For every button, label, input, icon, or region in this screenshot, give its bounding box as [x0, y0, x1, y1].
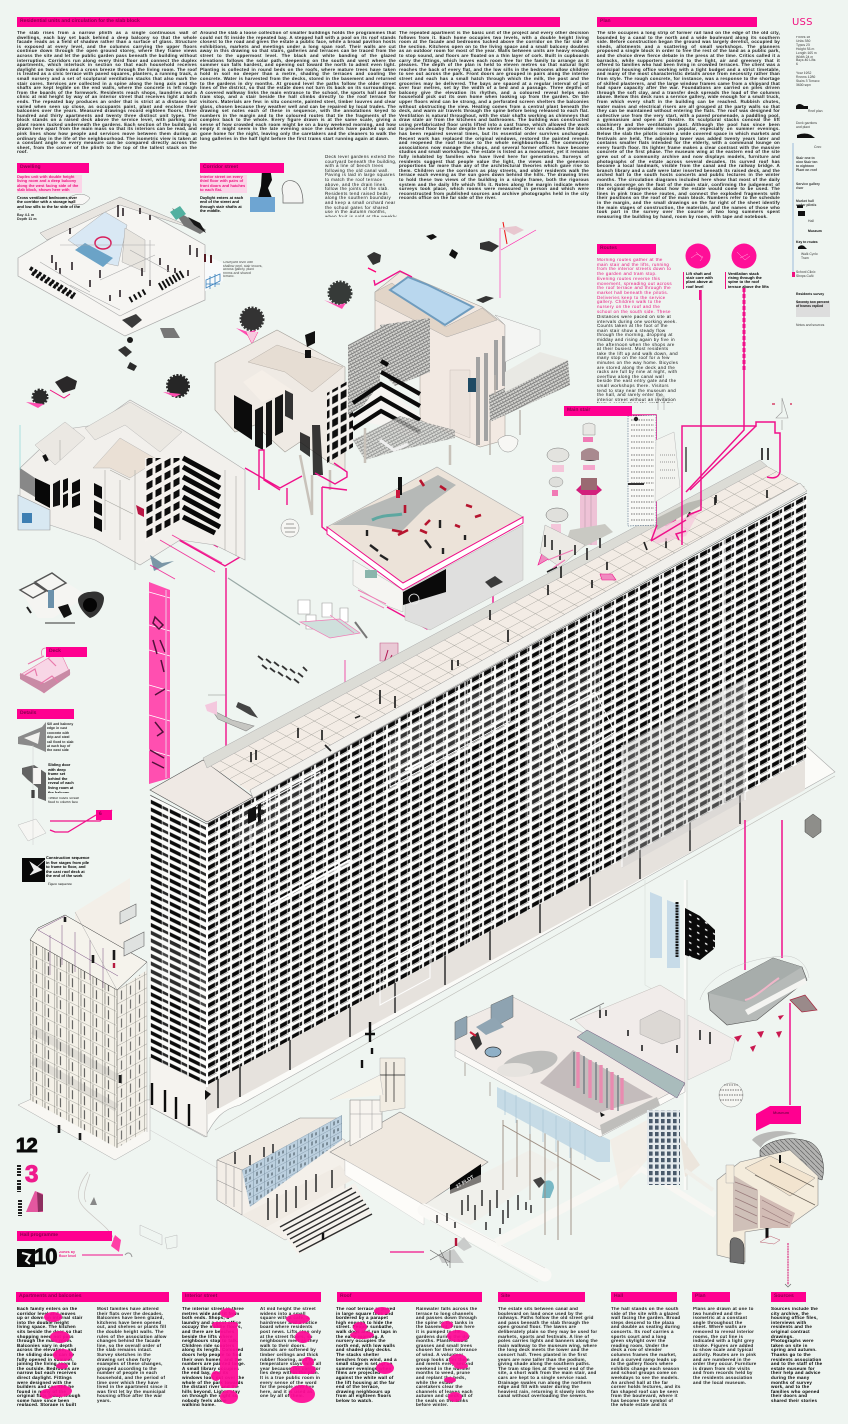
heading: pink tag details: Details	[20, 710, 36, 716]
text block: right rail notes: Seventy two percent of homes replied	[796, 300, 829, 308]
heading: section bar one: Residential units and circulation for the slab block	[20, 18, 140, 24]
machine near roof end	[205, 695, 258, 770]
faint sketch lower left	[78, 1172, 177, 1257]
heading: section bar two: Plan	[600, 18, 611, 24]
text block: column four: The site occupies a long strip of former rail land on the edge of the old city, bounded by a canal to the north and a wide boulevard along its southern side. Before construction began the ground was largely derelict, occupied by sheds, allotments and a scattering of small workshops. The planners proposed a single block in order to free the rest of the land as a public park, and the choice drew fierce debate in the press at the time. Critics called it a barracks, while supporters pointed to the light, air and greenery that it offered to families who had been living in crowded terraces. The client was a municipal housing office working with a tight budget and a strict timetable, and many of the most characteristic details arose from necessity rather than from style. The rough concrete, for instance, was a response to the shortage of skilled plasterers, and the large window frames came from a shipyard that had spare capacity after the war. Foundations are carried on piles driven through the soft clay, and a transfer deck spreads the load of the columns above. Below this deck runs a service gallery, wide enough for a small truck, from which every shaft in the building can be reached. Rubbish chutes, water mains and electrical risers are all grouped at the party walls so that they can be maintained without entering the flats. The roof was designed for collective use from the very start, with a paved promenade, a paddling pool, a gymnasium and open air theatre. Its sculptural stacks conceal the lift machinery and the ventilation plant. Although the pool has since been closed, the promenade remains popular, especially on summer evenings. Below the slab the pilotis create a wide covered space in which markets and festivals are held. The adjoining tower was added twenty years later and contains smaller flats intended for the elderly, with a communal lounge on every fourth floor. Its lighter frame makes a clear contrast with the massive concrete of the first phase. The museum wing at the eastern end of the site grew out of a community archive and now displays models, furniture and photographs of the estate across several decades. Its curved roof has become a local landmark, visible from the canal and the railway bridge. A branch library and a café were later inserted beneath its raised deck, and the arched hall to the south hosts concerts and public lectures in the winter months. The circulation diagrams included here show that most of the daily routes converge on the foot of the main stair, confirming the judgement of the original designers about how the estate would come to be used. The lines in pink trace these routes, and connect the exploded fragments with their positions on the roof of the main block. Numbers refer to the schedule in the margin, and the small drawings on the far right of the sheet identify the main stages of construction, the materials, and the names of those who took part in the survey over the course of two long summers spent measuring the building by hand, room by room, with tape and notebook.	[597, 31, 780, 219]
heading: bottom bar 2	[182, 1292, 321, 1302]
heading: bottom bar 7: Sources	[774, 1293, 794, 1299]
text block: pink and black notes A: Bay 4.1 m Depth 11 m	[17, 213, 37, 221]
inset caption graphic: blue grid	[205, 254, 223, 291]
crowd	[437, 1190, 531, 1234]
stem glyphs under pink circle	[742, 288, 746, 372]
heading: bottom bar 1	[16, 1292, 169, 1302]
roof: end slab, parapet and tile terrace	[150, 448, 807, 822]
text block: right rail notes: Walk Cycle Tram	[801, 252, 818, 260]
tall glass panels	[650, 892, 662, 958]
left mass	[215, 330, 345, 470]
exhibit crowd	[332, 475, 456, 531]
heading: pink tag diagram	[46, 647, 87, 656]
caption: emblem: Figure sequence	[48, 882, 72, 886]
hatched mid mass	[348, 328, 380, 415]
pink circles	[686, 244, 756, 268]
main slab building: right facade	[207, 493, 807, 1085]
central plaza block with sign	[330, 1022, 715, 1282]
right mass	[375, 272, 505, 447]
heading: pink tag diagram: Deck	[49, 648, 61, 654]
sketch thumbnails	[18, 722, 46, 845]
heading: pink bar lower left: Hall programme	[20, 1232, 58, 1238]
numerals artwork	[17, 1165, 43, 1267]
tags	[120, 904, 144, 956]
sign text: plot: 27 PLOT	[455, 1174, 475, 1190]
sign text: pink box label: Museum	[773, 1110, 789, 1115]
building: museum plate	[455, 880, 735, 1190]
black emblem	[22, 858, 45, 882]
title: USS: USS	[792, 17, 813, 28]
heading: bottom bar 4	[498, 1292, 585, 1302]
heading: bottom bar 6: Plan	[695, 1293, 706, 1299]
text block: right rail notes: Residents survey	[796, 292, 824, 296]
heading: pink tag A: Dwelling	[20, 164, 41, 170]
icons: sketch figures beside pink heading	[68, 168, 303, 212]
heading: pink tag B: Corridor street	[203, 164, 238, 170]
text block: column one: The slab rises from a narrow plinth as a single continuous wall of dwellings, each bay set back behind a deep balcony so that the whole facade reads as a field of shadow rather than a surface of glass. Structure is exposed at every level, and the columns carrying the upper floors continue down through the open ground storey, where they frame views across the site and let the public garden pass beneath the building without interruption. Corridors run along every third floor and connect the duplex apartments, which interlock in section so that each household receives daylight on two sides and a cross breeze through the living room. The roof is treated as a civic terrace with paved squares, planters, a running track, a small nursery and a set of sculptural ventilation stacks that also mark the stair cores. Services are collected in a spine along the long axis and the shafts are kept legible on the end walls, where the concrete is left rough from the boards of the formwork. Residents reach shops, laundries and a clinic at mid height by way of an interior street that receives light at both ends. The repeated bay produces an order that is strict at a distance but varied when seen up close, as occupants paint, plant and enclose their balconies over the years. Measured drawings record eighteen floors, three hundred and thirty apartments and twenty three distinct unit types. The block stands on a raised deck above the service level, with parking and plant rooms tucked underneath the gardens. Each section of the building is drawn here apart from the main mass so that its interiors can be read, and pink lines show how people and services move between them during an ordinary day in the life of the neighbourhood. The isometric view is taken at a constant angle so every measure can be compared directly across the sheet, from the corner of the plinth to the top of the tallest stack on the roof.	[17, 31, 197, 154]
building: lower hall with blue glazing	[217, 1115, 372, 1255]
main slab building: plate	[150, 745, 835, 1137]
numeral: 3: 3	[25, 1161, 38, 1188]
text block: right rail notes: Stair one to nine Stair ten to eighteen Plant on roof	[796, 156, 817, 172]
numeral: 10: 10	[34, 1244, 56, 1269]
interior striped walls	[733, 1175, 758, 1232]
text block: detail notes one: Sill and balcony edge in cast concrete with drip and steel rail fixed to slab at each bay of the west side	[47, 722, 73, 752]
text block: right rail notes: Hall	[808, 219, 814, 223]
text block: right rail notes: Core	[814, 145, 821, 149]
green-grey slab	[577, 1030, 685, 1098]
building: arched section with fan roof	[685, 1131, 824, 1264]
heading: pink tag upper roof	[564, 406, 632, 416]
heading: pink bar lower left	[17, 1231, 112, 1240]
numeral: 12: 12	[16, 1135, 37, 1157]
hatched pink core	[540, 1050, 653, 1113]
text block: right rail notes: School Clinic Shops Café	[796, 270, 816, 278]
small hex object	[805, 814, 821, 838]
text block: column three: The repeated apartment is the basic unit of the project and every other decision follows from it. Each home occupies two levels, with a double height living room at the facade and bedrooms tucked above the corridor on the far side of the section. Kitchens open on to the living space and a small balcony doubles as an outdoor room for most of the year. Walls between units are heavy enough to stop sound, and floors are floated on a thin layer of cork. Built in cupboards carry the fittings, which leaves each room free for the family to arrange as it pleases. The depth of the plan is held to eleven metres so that natural light reaches the back of every flat, and the low sills in the bedrooms allow children to see out across the park. Front doors are grouped in pairs along the interior street and each has a small hatch through which the milk, the post and the groceries may be delivered. The bays are spaced at a regular interval of just over four metres, set by the width of a bed and a passage. Three depths of balcony give the elevation its rhythm, and a coloured reveal helps each household pick out its own home when looking up from the garden. On the upper floors wind can be strong, and a perforated screen shelters the balconies without obstructing the view. Heating comes from a central plant beneath the deck, and warm air travels through the spine before being released to each flat. Ventilation is natural throughout, with the stair shafts working as chimneys that draw stale air from the kitchens and bathrooms. The building was constructed using prefabricated floor units lifted into a cast frame, which allowed the work to proceed floor by floor despite the winter weather. Over six decades the block has been repaired several times, but its essential order survives unchanged. Recent work has replaced the original windows, restored the painted reveals and reopened the roof terrace to the whole neighbourhood. The community associations now manage the shops, and several former offices have become studios and small workshops. The estate is listed as a monument, yet it remains fully inhabited by families who have lived here for generations. Surveys of residents suggest that people value the light, the views and the generous proportions far more than any of the architectural theories which gave rise to them. Children use the corridors as play streets, and older residents walk the terrace each evening as the sun goes down behind the hills. The drawing tries to hold these two views of the building in a single frame, both the rigorous system and the daily life which fills it. Notes along the margin indicate where surveys took place, which rooms were measured in person and which were reconstructed from published sources and archive photographs held in the city records office on the far side of the river.	[399, 31, 589, 200]
chevron stripes	[353, 361, 420, 432]
heading: pink tag route: 6	[99, 811, 102, 817]
heading: pink tag C: Routes	[600, 245, 617, 251]
building: central stepped complex with pool	[215, 272, 570, 515]
building: exhibition pavilion	[327, 467, 523, 630]
heading: section bar one	[17, 17, 560, 26]
facade ghost overlays	[150, 493, 807, 1087]
crowd cluster	[258, 656, 307, 683]
heading: bottom bar 1: Apartments and balconies	[19, 1293, 82, 1299]
text block: right rail notes: Market hall under pilotis	[796, 199, 816, 207]
text block: right rail notes: Service gallery riser	[796, 182, 820, 190]
heading: pink tag A	[17, 163, 89, 172]
roof people	[251, 448, 768, 762]
heading: bottom bar 7	[771, 1292, 806, 1302]
text block: right rail notes: Deck gardens and plant	[796, 121, 817, 129]
pink route arrow	[50, 810, 112, 832]
heading: pink tag route	[96, 810, 112, 820]
text block: right rail notes: Museum	[808, 229, 822, 233]
machine on plate	[455, 995, 513, 1040]
sketch text panel behind roof	[628, 396, 686, 526]
black sign	[450, 1164, 481, 1194]
text block: right rail notes: Year 1952 Rooms 1280 Stairs 3 Terrace 3600 sqm	[796, 71, 820, 87]
towers and mushroom objects	[281, 398, 792, 572]
heading: bottom bar 2: Interior street	[185, 1293, 217, 1299]
heading: pink tag upper roof: Main stair	[567, 407, 590, 413]
poles	[503, 1120, 600, 1240]
text block: bottom column 5: The roof terrace is paved in large square tiles and bordered by a parapet high enough to hide the street. People sunbathe, walk dogs and run laps in the early morning. A nursery occupies the north end, with low walls and shaded play decks. The stacks shelter benches from wind, and a small stage is set up on summer evenings when films are projected against the white wall of the lift housing at the far end of the terrace, drawing neighbours up from all eighteen floors below to watch.	[336, 1307, 397, 1403]
pink umbrellas	[734, 1015, 784, 1052]
round hatched globe	[719, 1083, 743, 1107]
heading: section bar two	[597, 17, 757, 26]
heading: bottom bar 5	[611, 1292, 677, 1302]
grey capsule	[700, 956, 817, 1052]
heading: bottom bar 4: Site	[501, 1293, 510, 1299]
arch	[730, 1238, 744, 1264]
text block: pink and black notes B	[200, 175, 247, 213]
building: top-left courtyard block	[18, 197, 206, 336]
black honeycomb mark	[677, 902, 715, 960]
heading: bottom bar 5: Hall	[614, 1293, 623, 1299]
heading: pink tag B	[200, 163, 284, 172]
heading: bottom bar 6	[692, 1292, 730, 1302]
heading: pink tag details	[17, 709, 74, 718]
steps	[280, 1188, 372, 1252]
pink dashed arrow	[785, 1243, 791, 1287]
right rail blue line and black glyphs	[792, 104, 815, 277]
lower-left tower	[18, 878, 217, 1168]
back room	[575, 985, 685, 1085]
mini diagram: panels and cable	[228, 578, 367, 638]
pink connector lines above roof	[82, 290, 790, 1255]
scattered black objects and trees	[26, 222, 536, 408]
courtyard floor	[68, 212, 127, 266]
glazed vertical stripes	[476, 336, 506, 445]
text block: pink and black notes A	[17, 175, 82, 221]
text block: bottom column 7: The estate sits between canal and boulevard on land once used by the railways. Paths follow the old street grid and pass beneath the slab through the open ground floor. The lawns are deliberately plain so they may be used for markets, sports and festivals. A line of poles carries lights and banners along the main walkway to the museum wing, where the long deck meets the tower and the concert hall. Trees planted in the first years are now taller than the podium, giving shade along the southern paths. The tram stop lies at the west end of the site, a short walk from the main stair, and cars are kept to a single service road. Drainage swales run along the northern edge and fill with water during the heaviest rain, returning it slowly into the canal without overloading the sewers.	[498, 1307, 598, 1398]
text block: right rail notes	[796, 36, 830, 326]
text block: right rail notes: Roof plan	[808, 109, 823, 113]
text block: bottom column 4: At mid height the street widens into a small square with a café, a hairdresser and a notice board where residents post news. Lifts stop only at the street floors, so neighbours meet as they walk to their doors. Sounds are softened by timber ceilings and thick rubber flooring, and the temperature stays mild all year because the corridor lies deep within the plan. It is a true public room in every sense of the word for the people who live here, and it is used as one by all of them.	[260, 1307, 321, 1398]
main slab building: ground floor	[150, 759, 805, 1137]
black screen	[403, 569, 446, 605]
text block: bottom column 6: Rainwater falls across the terrace to long channels and passes down through the spine to the tanks in the basement. From here it is pumped to the gardens during the dry months. Planters hold grasses and small trees chosen for their tolerance of wind. A volunteer group looks after them and meets every second weekend in the warmer months to weed, prune and replant the beds, while the estate caretakers clear the channels of leaves each autumn and check all of the seals on the tanks before winter.	[416, 1307, 477, 1406]
grid panel	[647, 1110, 680, 1185]
window grid	[327, 378, 353, 463]
building: left block with black windows	[18, 400, 245, 579]
pink connector lines under central complex	[170, 271, 523, 768]
text block: bottom column 9: Plans are drawn at one to two hundred and the isometric at a constant angle throughout the sheet. Where walls are removed to reveal interior rooms, the cut line is indicated with a light grey stroke. Figures are added to show scale and typical activity. Routes are in pink and are numbered in the order they occur. Furniture is drawn from site visits and from records held by the residents association and the local museum.	[693, 1307, 757, 1384]
pink sign box	[756, 1106, 801, 1131]
roof scaffold sign	[345, 643, 398, 690]
main slab building: left facade	[150, 795, 207, 1085]
text block: bottom column 3: The interior street is three metres wide and lit from both ends. Shops, a laundry and a post office occupy the middle floors, and there are benches beside the lifts where neighbours stop to talk. Children ride scooters along its length. Coloured doors help people to find their own homes, and the numbers are painted large. A small library occupies the end bay, and its windows look out over the whole of the park towards the distant river and the hills beyond. Lights stay on through the night so nobody feels alone walking home.	[182, 1307, 245, 1406]
heading: bottom bar 3: Roof	[340, 1293, 351, 1299]
terraces	[495, 315, 540, 362]
small isometric diagram with black blob	[20, 573, 104, 623]
inset blue box	[18, 495, 50, 530]
main plate	[455, 997, 685, 1130]
text block: right rail notes: Key to routes	[796, 240, 818, 244]
curtain	[497, 1087, 610, 1162]
heading: bottom bar 3	[337, 1292, 482, 1302]
heading: pink tag C	[597, 244, 656, 254]
pink vertical panel	[149, 582, 170, 784]
pool	[390, 277, 473, 325]
text block: bottom column 2: Most families have altered their flats over the decades. Balconies have been glazed, kitchens have been opened out, and shelves or plants fill the double height walls. The rules of the association allow changes behind the facade line, so the overall order of the slab remains intact. Survey sketches in the drawing set show forty examples of these changes, grouped according to the number of people in each household, and the period of time over which they have lived in the apartment since it was first let by the municipal housing office after the war years.	[97, 1307, 167, 1403]
pink sketch diagram	[20, 648, 70, 693]
text block: column two: Around the slab a loose collection of smaller buildings holds the programmes that could not fit inside the repeated bay. A stepped hall with a pool on its roof stands closest to the road and gives the estate a public face, while a broad pavilion hosts exhibitions, markets and meetings under a long span roof. Their walls are cut away in this drawing so that stairs, galleries and terraces can be traced from the street to the uppermost level. The black and white banding of the glazed elevations follows the solar path, deepening on the south and west where the summer sun falls hardest, and opening out toward the north to admit even light. Planting is collected in round beds on the roofs, where mature trees have taken hold in soil no deeper than a metre, shading the terraces and cooling the concrete. Water is harvested from the decks, stored in the basement and returned to the gardens in dry months. At ground level the paths follow the older street lines of the district, so that the estate does not turn its back on its surroundings. A covered walkway links the main entrance to the school, the sports hall and the tram stop, and a stair beside the hall climbs directly to the roof terrace for visitors. Materials are few: in situ concrete, painted steel, timber louvres and clear glass, chosen because they weather well and can be repaired by local trades. The drawing set notes each of these in sequence, with the annotations keyed to numbers in the margin and to the coloured routes that tie the fragments of the complex back to the whole. Every figure drawn is at the same scale, giving a sense of how crowded each room might be on a busy weekend morning, and how empty it might seem in the late evening once the markets have packed up and gone home for the night, leaving only the caretakers and the cleaners to walk the long galleries in the half light before the first trams start running again at dawn.	[200, 31, 396, 141]
